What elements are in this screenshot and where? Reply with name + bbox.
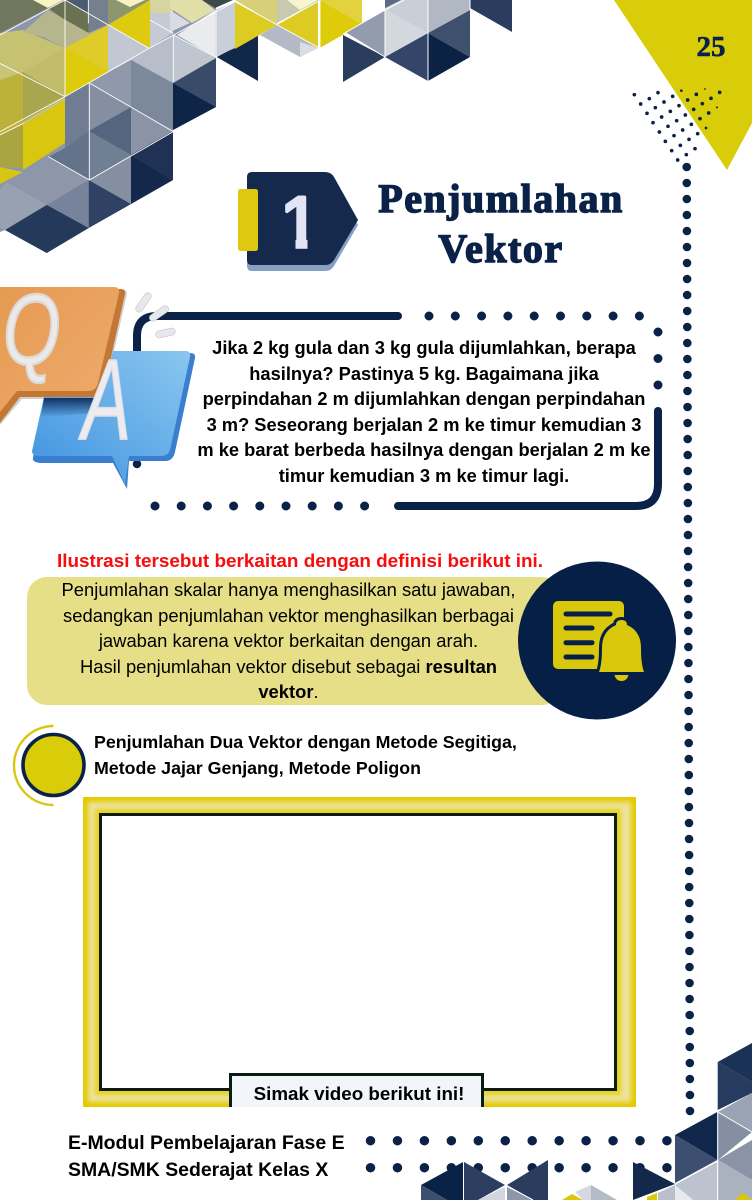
definition text [62,579,515,702]
callout text: hasilnya? Pastinya 5 kg. Bagaimana jika [249,362,599,384]
definition text: Hasil penjumlahan vektor disebut sebagai resultan [80,656,497,676]
icon: Q and A speech bubbles: Q [3,273,61,386]
footer text: SMA/SMK Sederajat Kelas X [68,1159,328,1181]
section heading: Metode Jajar Genjang, Metode Poligon [94,758,421,778]
video caption label [229,1073,484,1107]
definition text: Penjumlahan skalar hanya menghasilkan satu jawaban, [62,579,515,600]
definition text: sedangkan penjumlahan vektor menghasilkan berbagai [63,604,514,626]
callout text: perpindahan 2 m dijumlahkan dengan perpindahan [203,388,645,409]
callout text: timur kemudian 3 m ke timur lagi. [279,464,569,486]
title: Penjumlahan [378,176,624,221]
video frame [83,797,636,1107]
callout text: Jika 2 kg gula dan 3 kg gula dijumlahkan, berapa [212,337,636,358]
callout text [197,337,651,486]
video caption label: Simak video berikut ini! [254,1083,464,1104]
callout text: m ke barat berbeda hasilnya dengan berjalan 2 m ke [197,439,651,460]
number badge: 1 [280,183,320,263]
red heading: Ilustrasi tersebut berkaitan dengan definisi berikut ini. [57,551,543,572]
callout text: 3 m? Seseorang berjalan 2 m ke timur kemudian 3 [207,414,641,434]
page number: 25 [696,31,726,63]
title: Vektor [438,226,564,271]
section heading [94,732,517,778]
footer text [68,1132,345,1181]
section heading: Penjumlahan Dua Vektor dengan Metode Segitiga, [94,732,517,752]
definition text: jawaban karena vektor berkaitan dengan arah. [99,630,478,651]
definition text: vektor. [258,681,319,702]
panel: definition [27,577,562,705]
footer text: E-Modul Pembelajaran Fase E [68,1132,345,1154]
title [378,176,624,271]
icon: Q and A speech bubbles: A [78,337,131,464]
